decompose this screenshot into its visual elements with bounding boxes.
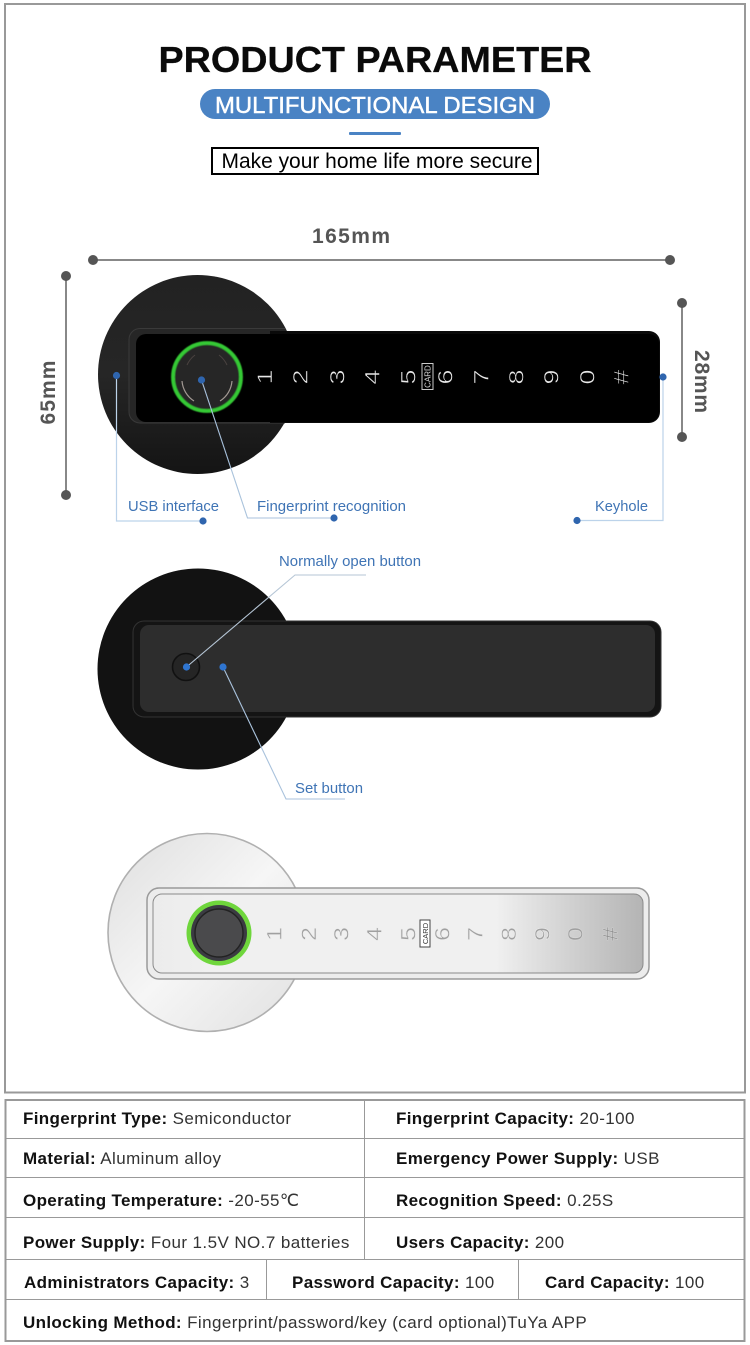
- dimension: 65mm height: [37, 271, 71, 500]
- callout: fingerprint recognition: [198, 376, 406, 522]
- keypad digits: 4: [362, 927, 386, 941]
- dimension: 28mm height: [677, 298, 713, 442]
- keypad digits: 2: [297, 927, 321, 941]
- callout: fingerprint recognition: Fingerprint recognition: [257, 499, 406, 515]
- silver lock front view: [108, 834, 649, 1032]
- spec: operating temperature: Operating Temperature: -20-55℃: [23, 1191, 299, 1210]
- callout: keyhole: Keyhole: [595, 499, 648, 515]
- keypad digits: 3: [326, 369, 350, 385]
- keypad digits: 7: [470, 369, 494, 385]
- keypad digits: 5: [397, 369, 421, 385]
- keypad digits: 3: [329, 927, 353, 941]
- keypad digits: 6: [430, 927, 454, 941]
- keypad digits: #: [598, 927, 622, 941]
- keypad digits: 9: [540, 369, 564, 385]
- callout: keyhole: [573, 373, 667, 524]
- spec: power supply: Power Supply: Four 1.5V NO.7 batteries: [23, 1233, 350, 1252]
- keypad digits: 8: [505, 369, 529, 385]
- fingerprint sensor: [173, 343, 241, 411]
- subtitle pill: MULTIFUNCTIONAL DESIGN: [215, 92, 535, 118]
- spec: users capacity: Users Capacity: 200: [396, 1233, 565, 1252]
- title: PRODUCT PARAMETER: [158, 39, 592, 80]
- black lock back view: [98, 568, 661, 770]
- table grid: [6, 1100, 744, 1341]
- spec: unlocking method: Unlocking Method: Fingerprint/password/key (card optional)TuYa APP: [23, 1313, 587, 1332]
- keypad digits: [262, 927, 622, 941]
- fingerprint sensor: [186, 900, 252, 966]
- keypad digits: 7: [463, 927, 487, 941]
- keypad digits: 1: [262, 927, 286, 941]
- black lock front view: [98, 275, 660, 474]
- spec: material: Material: Aluminum alloy: [23, 1149, 221, 1168]
- callout: USB interface: USB interface: [128, 499, 219, 515]
- spec: card capacity: Card Capacity: 100: [545, 1273, 705, 1292]
- tagline box: Make your home life more secure: [222, 150, 532, 173]
- dimension: 165mm width: [88, 225, 675, 265]
- keypad digits: 0: [576, 369, 600, 385]
- keypad digits: 6: [434, 369, 458, 385]
- keypad digits: #: [610, 369, 634, 385]
- dimension: 165mm width: 165mm: [312, 225, 390, 248]
- specification table: [6, 1100, 744, 1341]
- callout: set button: Set button: [295, 781, 363, 797]
- card badge: CARD: [421, 922, 430, 944]
- spec: password capacity: Password Capacity: 100: [292, 1273, 495, 1292]
- keypad digits: 8: [497, 927, 521, 941]
- callout: set button: [219, 663, 363, 799]
- callout: USB interface: [113, 372, 219, 525]
- spec: recognition speed: Recognition Speed: 0.25S: [396, 1191, 614, 1210]
- spec: fingerprint capacity: Fingerprint Capacity: 20-100: [396, 1109, 635, 1128]
- panel: product parameter: [5, 4, 745, 1092]
- spec: administrators capacity: Administrators Capacity: 3: [24, 1273, 250, 1292]
- accent dash: [349, 132, 401, 135]
- card badge: CARD: [424, 365, 432, 388]
- dimension: 65mm height: 65mm: [37, 360, 60, 424]
- dimension: 28mm height: 28mm: [690, 350, 713, 413]
- spec: emergency power supply: Emergency Power Supply: USB: [396, 1149, 660, 1168]
- keypad digits: 5: [396, 927, 420, 941]
- keypad digits: [254, 369, 634, 385]
- keypad digits: 0: [563, 927, 587, 941]
- callout: normally open button: [183, 554, 421, 671]
- spec: fingerprint type: Fingerprint Type: Semiconductor: [23, 1109, 291, 1128]
- normally open button: [172, 654, 200, 680]
- keypad digits: 9: [530, 927, 554, 941]
- keypad digits: 4: [361, 369, 385, 385]
- callout: normally open button: Normally open button: [279, 554, 421, 570]
- keypad digits: 1: [254, 369, 277, 385]
- keypad digits: 2: [289, 369, 313, 385]
